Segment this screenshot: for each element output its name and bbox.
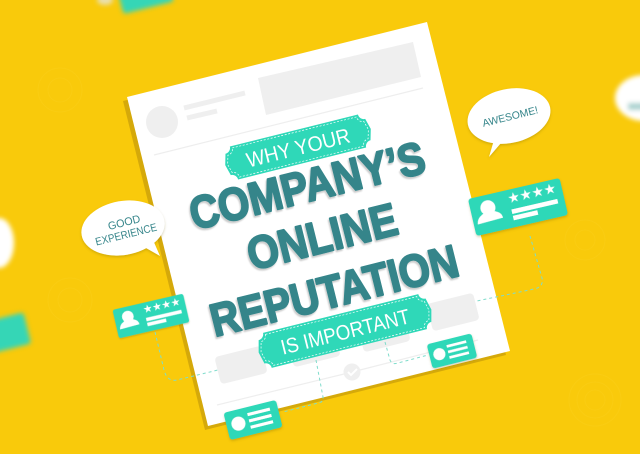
review card: left xyxy=(112,294,190,338)
speech bubble: awesome: AWESOME! xyxy=(481,104,539,130)
paper sheet xyxy=(127,22,510,426)
blurred background elements xyxy=(0,0,640,356)
dashed connector lines xyxy=(155,236,542,412)
speech bubble: good experience: GOOD xyxy=(107,213,142,233)
paper header placeholders xyxy=(146,42,423,155)
paper shadow xyxy=(123,26,506,430)
speech bubble: awesome xyxy=(462,81,556,157)
heading: why your: WHY YOUR xyxy=(244,124,353,172)
heading: is important: IS IMPORTANT xyxy=(279,305,412,360)
icon: check mark circle xyxy=(344,364,360,380)
title: company's online reputation: COMPANY’S xyxy=(184,131,430,240)
profile card: right xyxy=(427,333,477,369)
ribbon: is important xyxy=(254,292,436,370)
title: company's online reputation xyxy=(184,131,464,346)
paper footer placeholders xyxy=(214,293,480,405)
title: company's online reputation: REPUTATION xyxy=(205,235,464,346)
title: company's online reputation: ONLINE xyxy=(242,193,403,280)
profile card: bottom xyxy=(223,400,283,440)
speech bubble: good experience: EXPERIENCE xyxy=(94,222,158,249)
review card: right xyxy=(468,178,568,236)
ribbon: why your xyxy=(221,112,375,182)
speech bubble: good experience xyxy=(77,194,169,262)
